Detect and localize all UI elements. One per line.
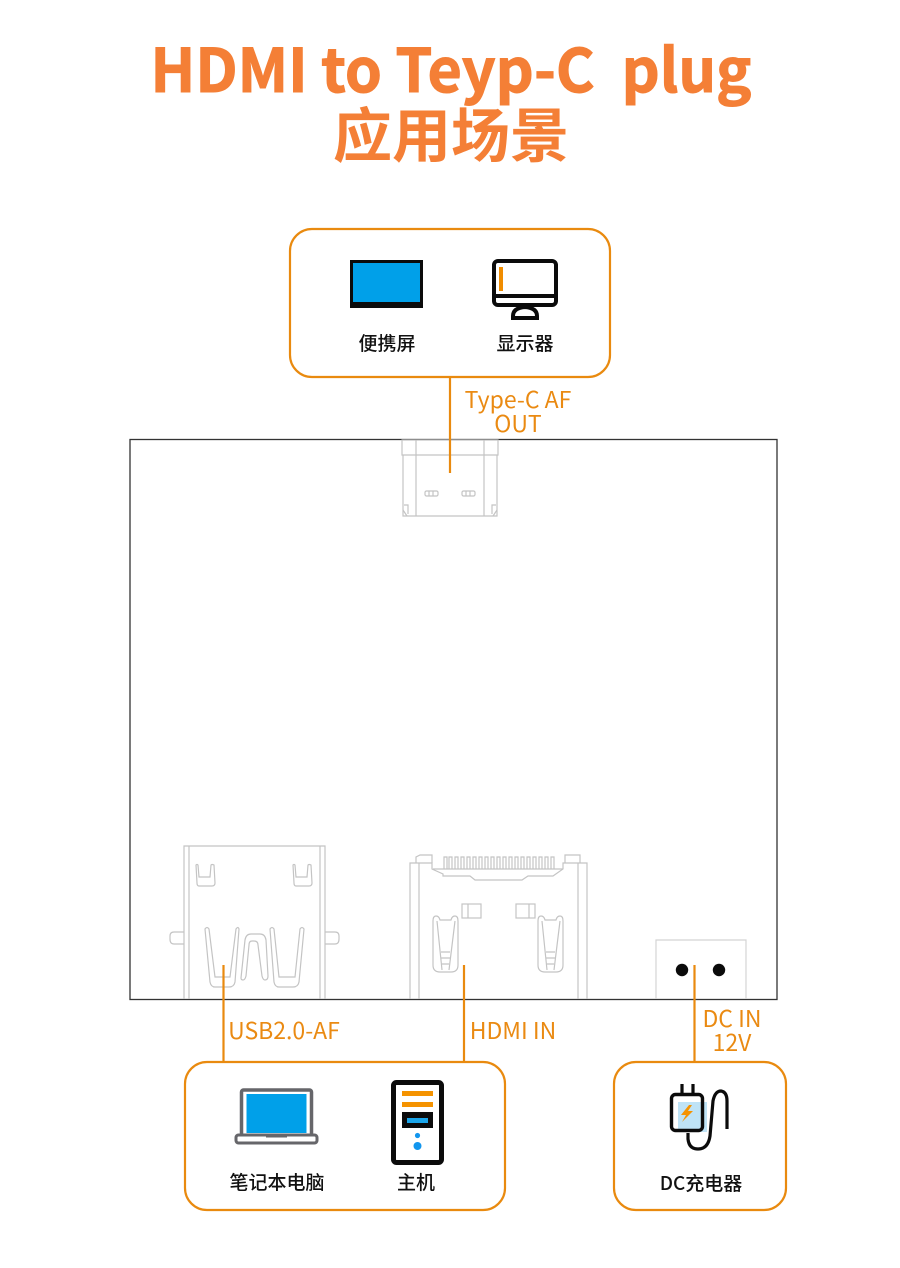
HDMI connector drawing — [410, 855, 587, 999]
port label: DC IN 12V: 12V — [713, 1024, 752, 1058]
Type-C connector drawing — [402, 440, 498, 516]
icon: desktop tower — [394, 1082, 442, 1162]
panel: sources — [185, 1062, 505, 1210]
DC jack drawing — [656, 940, 746, 999]
label: 显示器: 显示器 — [496, 329, 554, 356]
port label: Type-C AF OUT: Type-C AF — [465, 381, 572, 415]
USB2.0-AF connector drawing — [170, 846, 339, 999]
port label: Type-C AF OUT — [465, 381, 572, 439]
label: 便携屏: 便携屏 — [358, 329, 416, 356]
circuit board outline — [130, 440, 777, 1000]
panel: DC charger — [614, 1062, 786, 1210]
port label: USB2.0-AF: USB2.0-AF — [228, 1012, 340, 1046]
port label: DC IN 12V: DC IN — [702, 1000, 762, 1034]
icon: charger — [672, 1084, 727, 1149]
label: DC充电器: DC充电器 — [660, 1169, 742, 1196]
title: 应用场景 — [333, 89, 569, 174]
label: 主机: 主机 — [397, 1168, 435, 1195]
icon: monitor — [493, 261, 557, 318]
port label: HDMI IN: HDMI IN — [470, 1012, 556, 1046]
title: HDMI to Teyp-C plug — [150, 23, 752, 110]
icon: laptop — [236, 1090, 317, 1143]
title — [150, 23, 752, 174]
connector lines — [224, 377, 694, 1062]
label: 笔记本电脑: 笔记本电脑 — [229, 1168, 325, 1195]
port label: DC IN 12V — [702, 1000, 762, 1058]
panel: output displays — [290, 229, 610, 377]
icon: portable screen — [350, 260, 423, 308]
port label: Type-C AF OUT: OUT — [494, 405, 542, 439]
